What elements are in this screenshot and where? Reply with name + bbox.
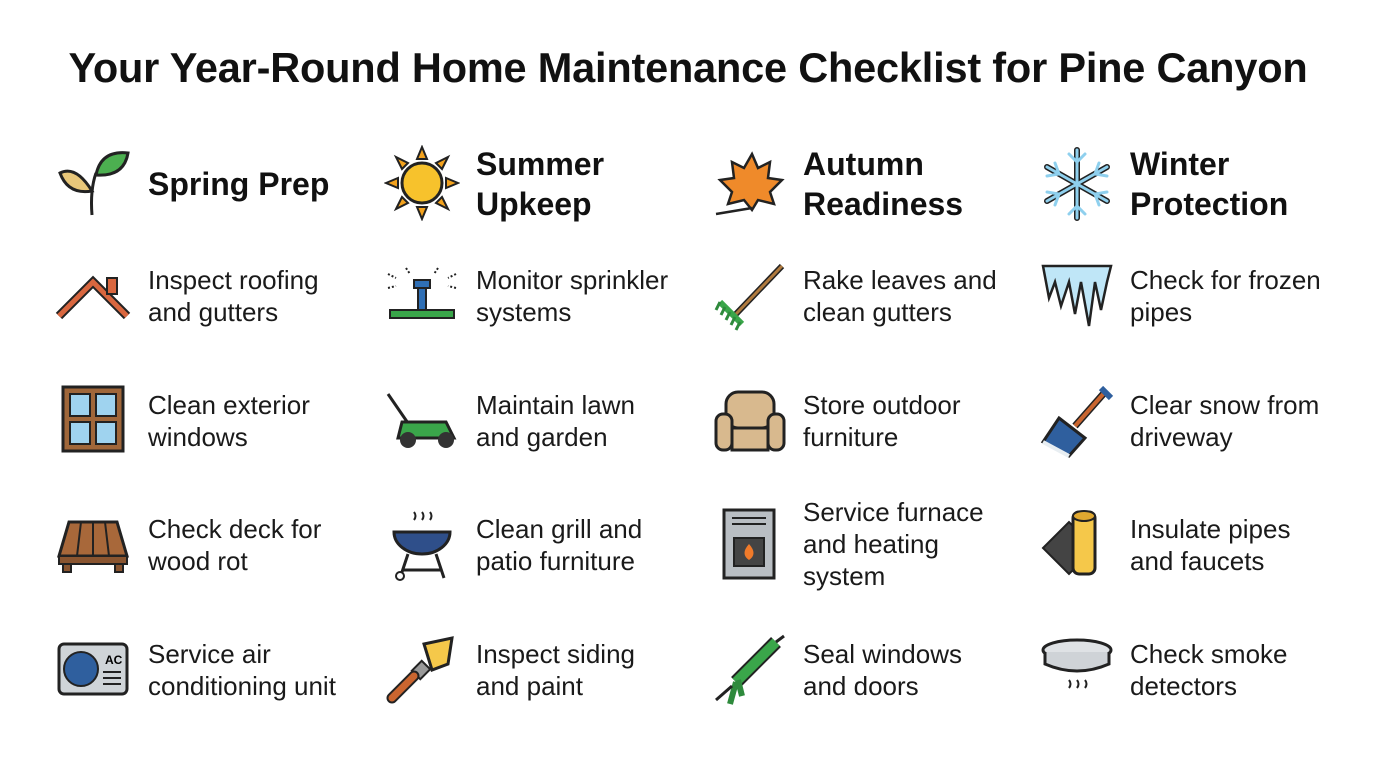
icon: rake [714,264,784,331]
text: driveway [1130,422,1233,452]
text: Inspect roofing [148,265,319,295]
text [148,265,319,327]
icon: insulation roll [1042,510,1096,576]
text: Store outdoor [803,390,961,420]
text: Check for frozen [1130,265,1321,295]
text: and garden [476,422,608,452]
title: Your Year-Round Home Maintenance Checklist for Pine Canyon [68,44,1308,91]
text [476,639,635,701]
text: wood rot [148,546,248,576]
text: Monitor sprinkler [476,265,668,295]
text [1130,390,1319,452]
text: Maintain lawn [476,390,635,420]
text: and doors [803,671,919,701]
text: system [803,561,885,591]
text: conditioning unit [148,671,336,701]
text: Clear snow from [1130,390,1319,420]
text: detectors [1130,671,1237,701]
icon: AC unit [58,642,128,696]
text: Service furnace [803,497,984,527]
text: Service air [148,639,271,669]
icon: icicles [1042,264,1113,326]
text [1130,265,1321,327]
icon: sun [384,145,460,221]
text: Check smoke [1130,639,1288,669]
heading: Summer Upkeep [476,146,604,222]
text: Seal windows [803,639,962,669]
text: patio furniture [476,546,635,576]
heading: Autumn Readiness: Readiness [803,186,963,222]
text [1130,638,1288,702]
text [148,639,336,701]
icon: paintbrush [386,636,454,704]
text [1130,513,1290,577]
text [803,390,961,452]
icon: AC unit: AC [105,653,123,667]
text [148,390,310,452]
heading: Winter Protection [1130,146,1288,222]
text: systems [476,297,571,327]
icon: roof [56,276,130,320]
text [148,514,321,576]
column: spring [56,151,336,701]
text [476,265,668,327]
text: and heating [803,529,939,559]
text [803,639,962,701]
heading: Summer Upkeep: Summer [476,146,604,182]
column: summer [384,145,668,704]
text [803,265,997,327]
heading: Autumn Readiness: Autumn [803,146,924,182]
icon: furnace [722,508,776,580]
text [476,390,635,452]
icon: caulk gun [715,634,785,705]
icon: window [62,386,124,452]
text [803,497,984,591]
icon: smoke detector [1039,634,1115,710]
text: furniture [803,422,898,452]
text: Check deck for [148,514,321,544]
text [476,514,642,576]
heading: Winter Protection: Protection [1130,186,1288,222]
text: Rake leaves and [803,265,997,295]
heading: Winter Protection: Winter [1130,146,1229,182]
heading: Spring Prep: Spring Prep [148,166,329,202]
icon: sprinkler [388,268,456,319]
heading: Autumn Readiness [803,146,963,222]
icon: armchair [714,390,786,452]
icon: deck [57,520,129,573]
column: autumn [714,146,997,705]
text: and gutters [148,297,278,327]
text: Clean grill and [476,514,642,544]
text: pipes [1130,297,1192,327]
text: Inspect siding [476,639,635,669]
icon: maple leaf [716,151,785,216]
text: and faucets [1130,546,1264,576]
icon: snowflake [1044,147,1110,221]
icon: lawn mower [386,393,456,448]
column: winter [1040,146,1321,701]
icon: snow shovel [1040,386,1114,458]
icon: leaves [58,151,130,216]
text: Clean exterior [148,390,310,420]
heading: Summer Upkeep: Upkeep [476,186,592,222]
text: clean gutters [803,297,952,327]
text: windows [148,422,248,452]
text: Insulate pipes [1130,514,1290,544]
text: and paint [476,671,583,701]
icon: grill [392,511,452,581]
